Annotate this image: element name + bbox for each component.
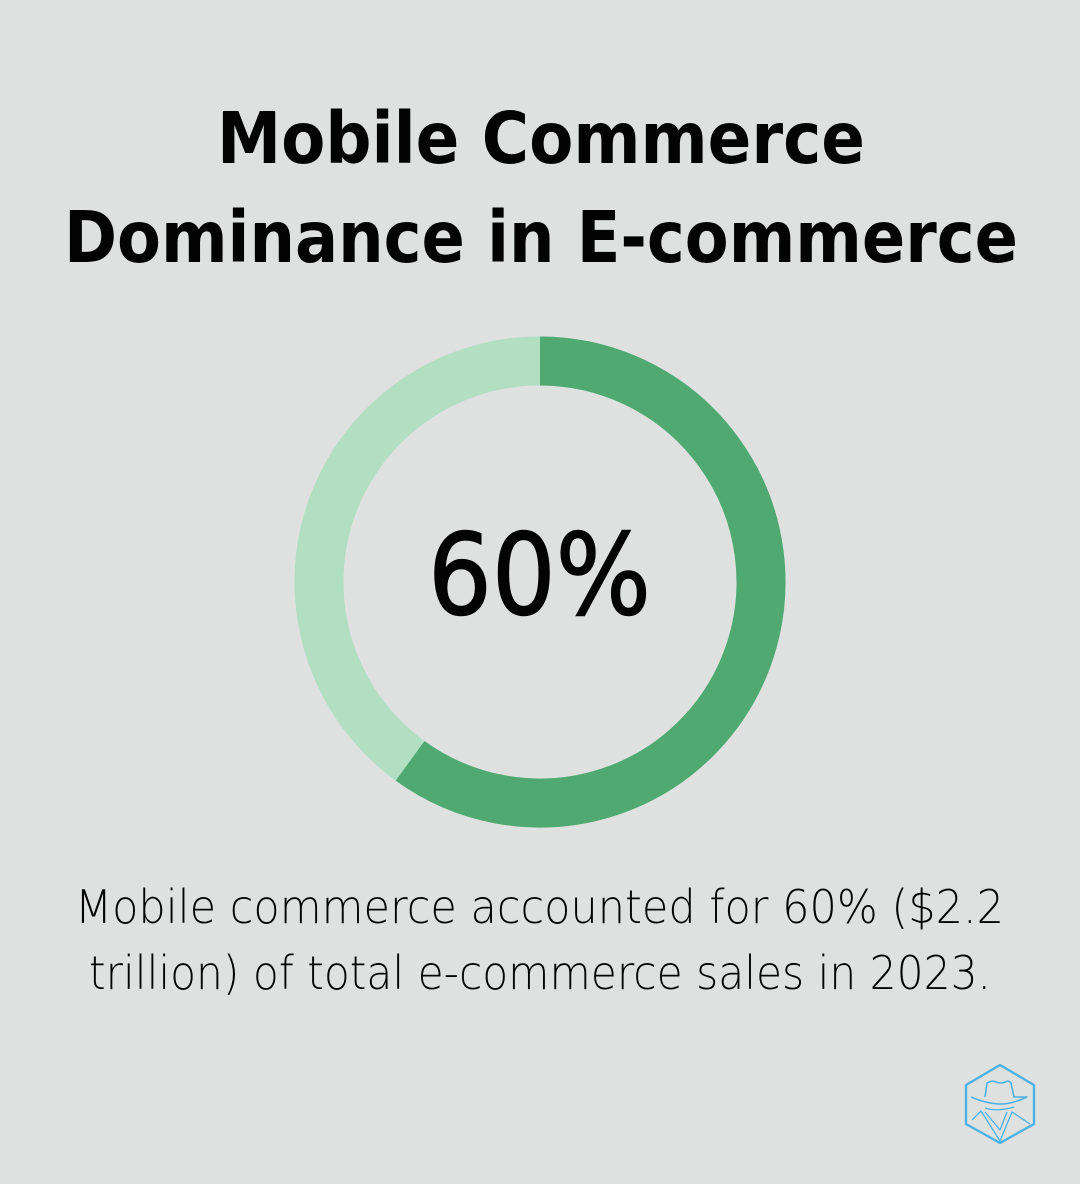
- mobile commerce 60% segment: [410, 361, 761, 803]
- description: Mobile commerce accounted for 60% ($2.2: [75, 880, 1004, 934]
- title: Mobile Commerce: [217, 97, 865, 180]
- title: [64, 97, 1018, 279]
- center value: 60%: [428, 511, 651, 641]
- description: [75, 880, 1004, 1000]
- donut chart: 60% share: [319, 361, 761, 803]
- icon: spy logo hexagon: [966, 1065, 1034, 1143]
- description: trillion) of total e-commerce sales in 2023.: [89, 946, 991, 1000]
- remaining 40% segment: [319, 361, 761, 803]
